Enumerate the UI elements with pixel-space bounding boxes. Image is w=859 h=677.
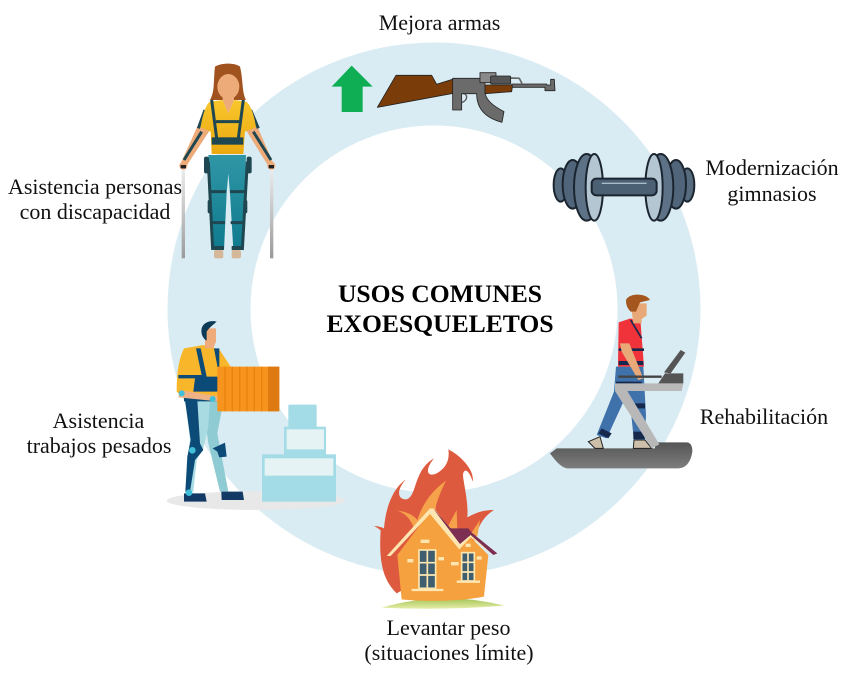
legs (597, 367, 646, 442)
label: levantar peso: Levantar peso (386, 615, 510, 640)
windows (419, 550, 474, 588)
ring background (209, 84, 659, 534)
face (217, 74, 239, 99)
label: mejora armas: Mejora armas (379, 10, 500, 35)
exoskeleton (208, 100, 247, 250)
stacked boxes (262, 405, 336, 502)
label: asistencia personas con discapacidad: Asistencia personas (8, 174, 182, 199)
label: asistencia trabajos pesados (27, 408, 171, 458)
head (631, 303, 647, 323)
ground (382, 598, 504, 609)
crutches (182, 165, 273, 258)
label: asistencia trabajos pesados: trabajos pesados (27, 433, 171, 458)
icon: green up arrow (332, 66, 373, 112)
label: modernización gimnasios (705, 155, 839, 206)
shoes (214, 250, 223, 258)
icon: dumbbell (554, 154, 694, 221)
treadmill base (550, 442, 692, 468)
arm (178, 390, 230, 402)
label: modernización gimnasios: gimnasios (727, 181, 817, 206)
ground shadow (167, 491, 345, 510)
back leg (200, 402, 228, 492)
shoes (588, 437, 652, 448)
label: rehabilitación: Rehabilitación (700, 404, 828, 429)
shoes (184, 492, 244, 502)
label: asistencia personas con discapacidad: con discapacidad (20, 199, 170, 224)
front leg (185, 400, 210, 492)
icon: worker carrying box (167, 321, 345, 510)
frame (615, 383, 683, 448)
box (217, 367, 279, 411)
bricks (407, 541, 482, 564)
label: asistencia trabajos pesados: Asistencia (53, 408, 145, 433)
title (326, 279, 554, 338)
icon: rifle (377, 73, 555, 122)
title: EXOESQUELETOS (326, 309, 554, 338)
hand and joint markers (179, 390, 216, 496)
shirt (618, 318, 644, 367)
legs (208, 155, 246, 250)
label: asistencia personas con discapacidad (8, 174, 182, 224)
hair (210, 64, 246, 100)
arm (620, 343, 643, 380)
label: modernización gimnasios: Modernización (705, 155, 839, 180)
icon: burning house (374, 449, 504, 609)
label: levantar peso (364, 615, 534, 665)
flames (374, 449, 494, 593)
house wall (397, 512, 488, 601)
icon: woman with exoskeleton and crutches (179, 64, 275, 258)
torso (177, 345, 231, 399)
label: levantar peso: (situaciones límite) (364, 640, 534, 665)
hand grips (181, 162, 274, 172)
icon: man on treadmill (550, 295, 692, 468)
head (205, 328, 216, 348)
arms (181, 113, 273, 167)
top (201, 100, 256, 154)
title: USOS COMUNES (338, 279, 542, 308)
roof (387, 508, 497, 556)
